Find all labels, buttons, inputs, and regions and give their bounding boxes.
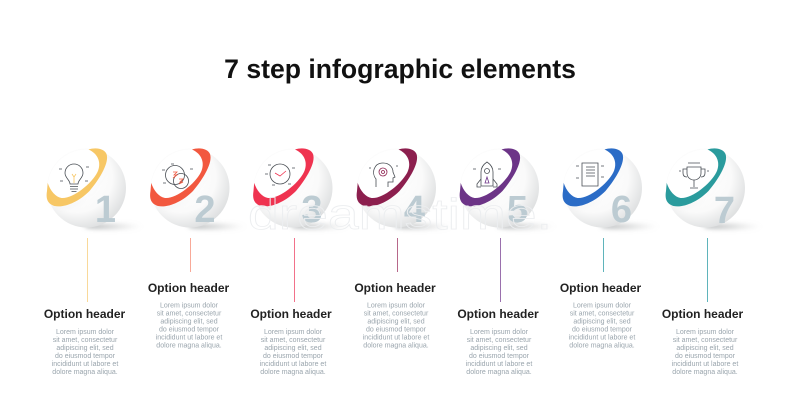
option text 1: Lorem ipsum dolor <box>56 329 115 336</box>
option text 2: incididunt ut labore et <box>156 334 222 342</box>
option text 1: incididunt ut labore et <box>52 361 118 368</box>
icon: document <box>576 163 604 186</box>
option text 1 <box>44 307 125 376</box>
option text 2: Lorem ipsum dolor <box>160 302 219 310</box>
option text 1: do eiusmod tempor <box>55 353 116 360</box>
sphere 2: 2 <box>194 189 216 231</box>
option text 5: do eiusmod tempor <box>469 353 530 360</box>
option text 1: Option header <box>44 307 125 321</box>
connector line 3 <box>294 238 295 302</box>
option text 2 <box>148 281 229 350</box>
sphere 6: 6 <box>611 189 632 231</box>
step 6 <box>560 148 658 350</box>
connector line 2 <box>190 238 191 272</box>
option text 4: sit amet, consectetur <box>364 310 429 318</box>
step 7 <box>662 148 762 376</box>
sphere 5 <box>460 148 556 231</box>
option text 2: Option header <box>148 281 229 295</box>
option text 4: Lorem ipsum dolor <box>367 302 426 310</box>
option text 7: adipiscing elit, sed <box>676 345 734 352</box>
option text 6: Lorem ipsum dolor <box>573 302 632 310</box>
option text 4: Option header <box>354 281 436 295</box>
option text 5: Option header <box>457 307 539 321</box>
connector line 4 <box>397 238 398 272</box>
option text 3: sit amet, consectetur <box>261 337 326 344</box>
option text 1: sit amet, consectetur <box>53 337 118 344</box>
option text 5: incididunt ut labore et <box>466 361 532 368</box>
option text 7: do eiusmod tempor <box>675 353 736 360</box>
sphere 1 <box>47 148 142 231</box>
option text 5: sit amet, consectetur <box>467 337 532 344</box>
option text 5: dolore magna aliqua. <box>466 369 532 376</box>
option text 6: Option header <box>560 281 641 295</box>
option text 6: adipiscing elit, sed <box>573 318 631 326</box>
option text 7: sit amet, consectetur <box>673 337 738 344</box>
option text 3 <box>250 307 332 376</box>
sphere 1: 1 <box>95 189 116 231</box>
option text 3: incididunt ut labore et <box>260 361 326 368</box>
icon: clock <box>265 164 295 185</box>
connector line 5 <box>500 238 501 302</box>
sphere 5: 5 <box>507 189 528 231</box>
option text 4: incididunt ut labore et <box>363 334 429 342</box>
option text 7: Lorem ipsum dolor <box>676 329 735 336</box>
option text 2: do eiusmod tempor <box>159 326 220 334</box>
icon: rocket <box>473 162 501 187</box>
option text 4: adipiscing elit, sed <box>367 318 425 326</box>
option text 7: Option header <box>662 307 743 321</box>
sphere 7: 7 <box>714 190 735 232</box>
option text 1: dolore magna aliqua. <box>52 369 118 376</box>
title: 7 step infographic elements <box>224 54 576 84</box>
option text 3: dolore magna aliqua. <box>260 369 326 376</box>
icon: coins <box>162 164 193 188</box>
option text 4 <box>354 281 436 350</box>
sphere 7 <box>666 148 762 232</box>
option text 3: adipiscing elit, sed <box>264 345 322 352</box>
sphere 3: 3 <box>301 189 323 231</box>
option text 3: do eiusmod tempor <box>263 353 324 360</box>
step 4 <box>354 148 452 350</box>
option text 7: incididunt ut labore et <box>672 361 738 368</box>
option text 5 <box>457 307 539 376</box>
option text 7: dolore magna aliqua. <box>672 369 738 376</box>
step 2 <box>148 148 246 350</box>
watermark: dreamstime. <box>248 190 552 239</box>
sphere 2 <box>150 148 246 231</box>
connector line 6 <box>603 238 604 272</box>
option text 6: incididunt ut labore et <box>569 334 635 342</box>
option text 5: Lorem ipsum dolor <box>470 329 529 336</box>
option text 3: Option header <box>250 307 332 321</box>
icon: trophy <box>679 163 709 188</box>
step 3 <box>250 148 349 376</box>
option text 6: sit amet, consectetur <box>570 310 635 318</box>
option text 4: dolore magna aliqua. <box>363 342 429 350</box>
icon: light bulb <box>59 164 89 192</box>
option text 5: adipiscing elit, sed <box>470 345 528 352</box>
option text 2: dolore magna aliqua. <box>156 342 222 350</box>
connector line 7 <box>707 238 708 302</box>
option text 3: Lorem ipsum dolor <box>264 329 323 336</box>
option text 6: dolore magna aliqua. <box>569 342 635 350</box>
sphere 6 <box>563 148 658 231</box>
sphere 3 <box>253 148 349 231</box>
option text 4: do eiusmod tempor <box>366 326 427 334</box>
option text 7 <box>662 307 743 376</box>
connector line 1 <box>87 238 88 302</box>
option text 6 <box>560 281 641 350</box>
step 1 <box>44 148 142 376</box>
step 5 <box>457 148 556 376</box>
sphere 4 <box>357 148 452 231</box>
option text 6: do eiusmod tempor <box>572 326 633 334</box>
option text 2: adipiscing elit, sed <box>160 318 218 326</box>
sphere 4: 4 <box>404 189 425 231</box>
option text 2: sit amet, consectetur <box>157 310 222 318</box>
icon: head with gear <box>369 163 398 187</box>
option text 1: adipiscing elit, sed <box>56 345 114 352</box>
